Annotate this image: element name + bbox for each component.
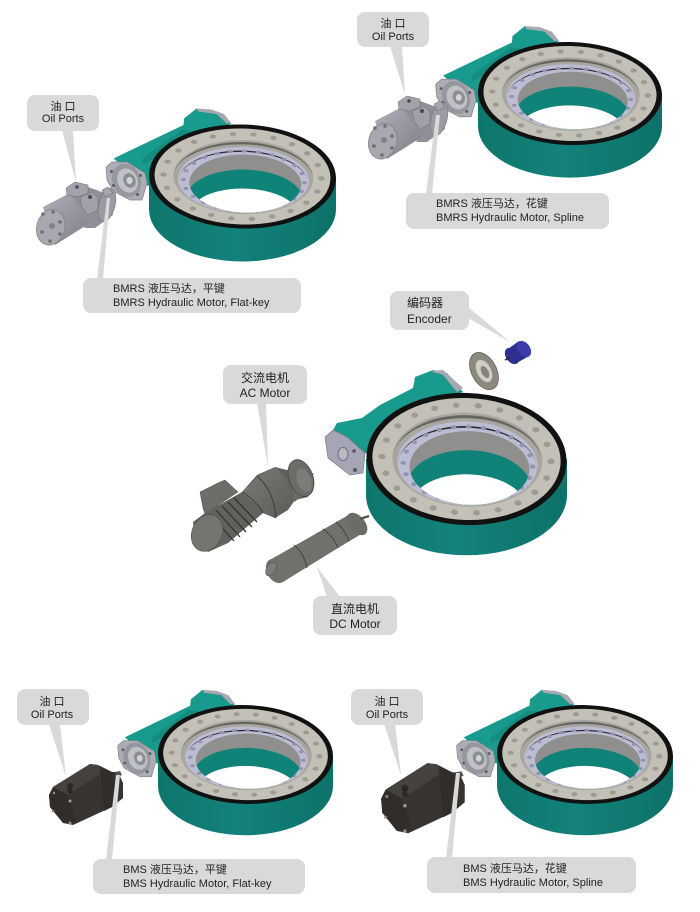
slewing ring xyxy=(365,390,568,543)
callout: BMS flat-key motor: BMS 液压马达，平键 xyxy=(123,862,227,876)
callout: oil ports: 油 口 xyxy=(374,694,400,708)
callout: oil ports xyxy=(27,95,99,182)
slewing drive xyxy=(118,690,334,835)
icon: AC motor xyxy=(185,456,319,557)
slewing drive xyxy=(106,108,337,262)
callout: oil ports xyxy=(357,12,429,95)
callout: encoder: 编码器 xyxy=(407,295,443,310)
icon: encoder xyxy=(502,338,534,367)
callout: oil ports xyxy=(351,689,423,775)
product group: BMS flat-key drive xyxy=(17,689,334,894)
slewing drive body xyxy=(366,459,567,555)
callout: oil ports: 油 口 xyxy=(50,99,76,113)
callout: BMS spline motor: BMS Hydraulic Motor, Spline xyxy=(463,877,603,889)
callout: BMS spline motor xyxy=(427,773,636,893)
callout: encoder: Encoder xyxy=(407,312,452,326)
callout: DC motor: DC Motor xyxy=(329,617,381,631)
icon: encoder flange xyxy=(464,347,504,395)
callout: BMS spline motor: BMS 液压马达，花键 xyxy=(463,861,567,875)
slewing drive arm cap xyxy=(430,370,463,392)
callout: BMRS spline motor xyxy=(406,115,609,229)
callout: DC motor: 直流电机 xyxy=(331,602,379,616)
callout: DC motor xyxy=(313,567,397,635)
slewing drive arm xyxy=(333,370,463,455)
callout: oil ports: 油 口 xyxy=(39,694,65,708)
callout: AC motor: 交流电机 xyxy=(241,370,289,385)
callout: AC motor: AC Motor xyxy=(240,386,290,400)
icon: DC motor xyxy=(262,509,371,587)
callout: oil ports xyxy=(17,689,89,777)
callout: oil ports: Oil Ports xyxy=(31,709,74,721)
icon: BMRS hydraulic motor xyxy=(365,96,451,162)
callout: BMRS spline motor: BMRS Hydraulic Motor, Spline xyxy=(436,212,584,224)
callout: encoder xyxy=(390,291,510,342)
slewing drive xyxy=(457,690,674,835)
icon: BMS hydraulic motor xyxy=(381,763,465,833)
callout: BMRS flat-key motor: BMRS Hydraulic Motor, Flat-key xyxy=(113,297,270,309)
callout: oil ports: 油 口 xyxy=(380,16,406,30)
product group: BMS spline drive xyxy=(351,689,674,893)
slewing drive xyxy=(436,26,663,178)
product group: BMRS flat-key drive xyxy=(27,95,337,313)
callout: BMRS flat-key motor xyxy=(83,198,301,313)
callout: oil ports: Oil Ports xyxy=(42,113,85,125)
slewing drive housing xyxy=(325,430,365,475)
callout: BMRS spline motor: BMRS 液压马达，花键 xyxy=(436,196,548,210)
callout: oil ports: Oil Ports xyxy=(366,709,409,721)
callout: BMS flat-key motor: BMS Hydraulic Motor, Flat-key xyxy=(123,878,272,890)
callout: BMRS flat-key motor: BMRS 液压马达，平键 xyxy=(113,281,225,295)
callout: AC motor xyxy=(223,365,307,467)
icon: BMRS hydraulic motor xyxy=(33,182,119,248)
callout: BMS flat-key motor xyxy=(93,775,305,894)
product group: BMRS spline drive xyxy=(357,12,663,229)
callout: oil ports: Oil Ports xyxy=(372,31,415,43)
icon: BMS hydraulic motor xyxy=(49,764,123,825)
product group: electric motor drive xyxy=(185,291,568,635)
